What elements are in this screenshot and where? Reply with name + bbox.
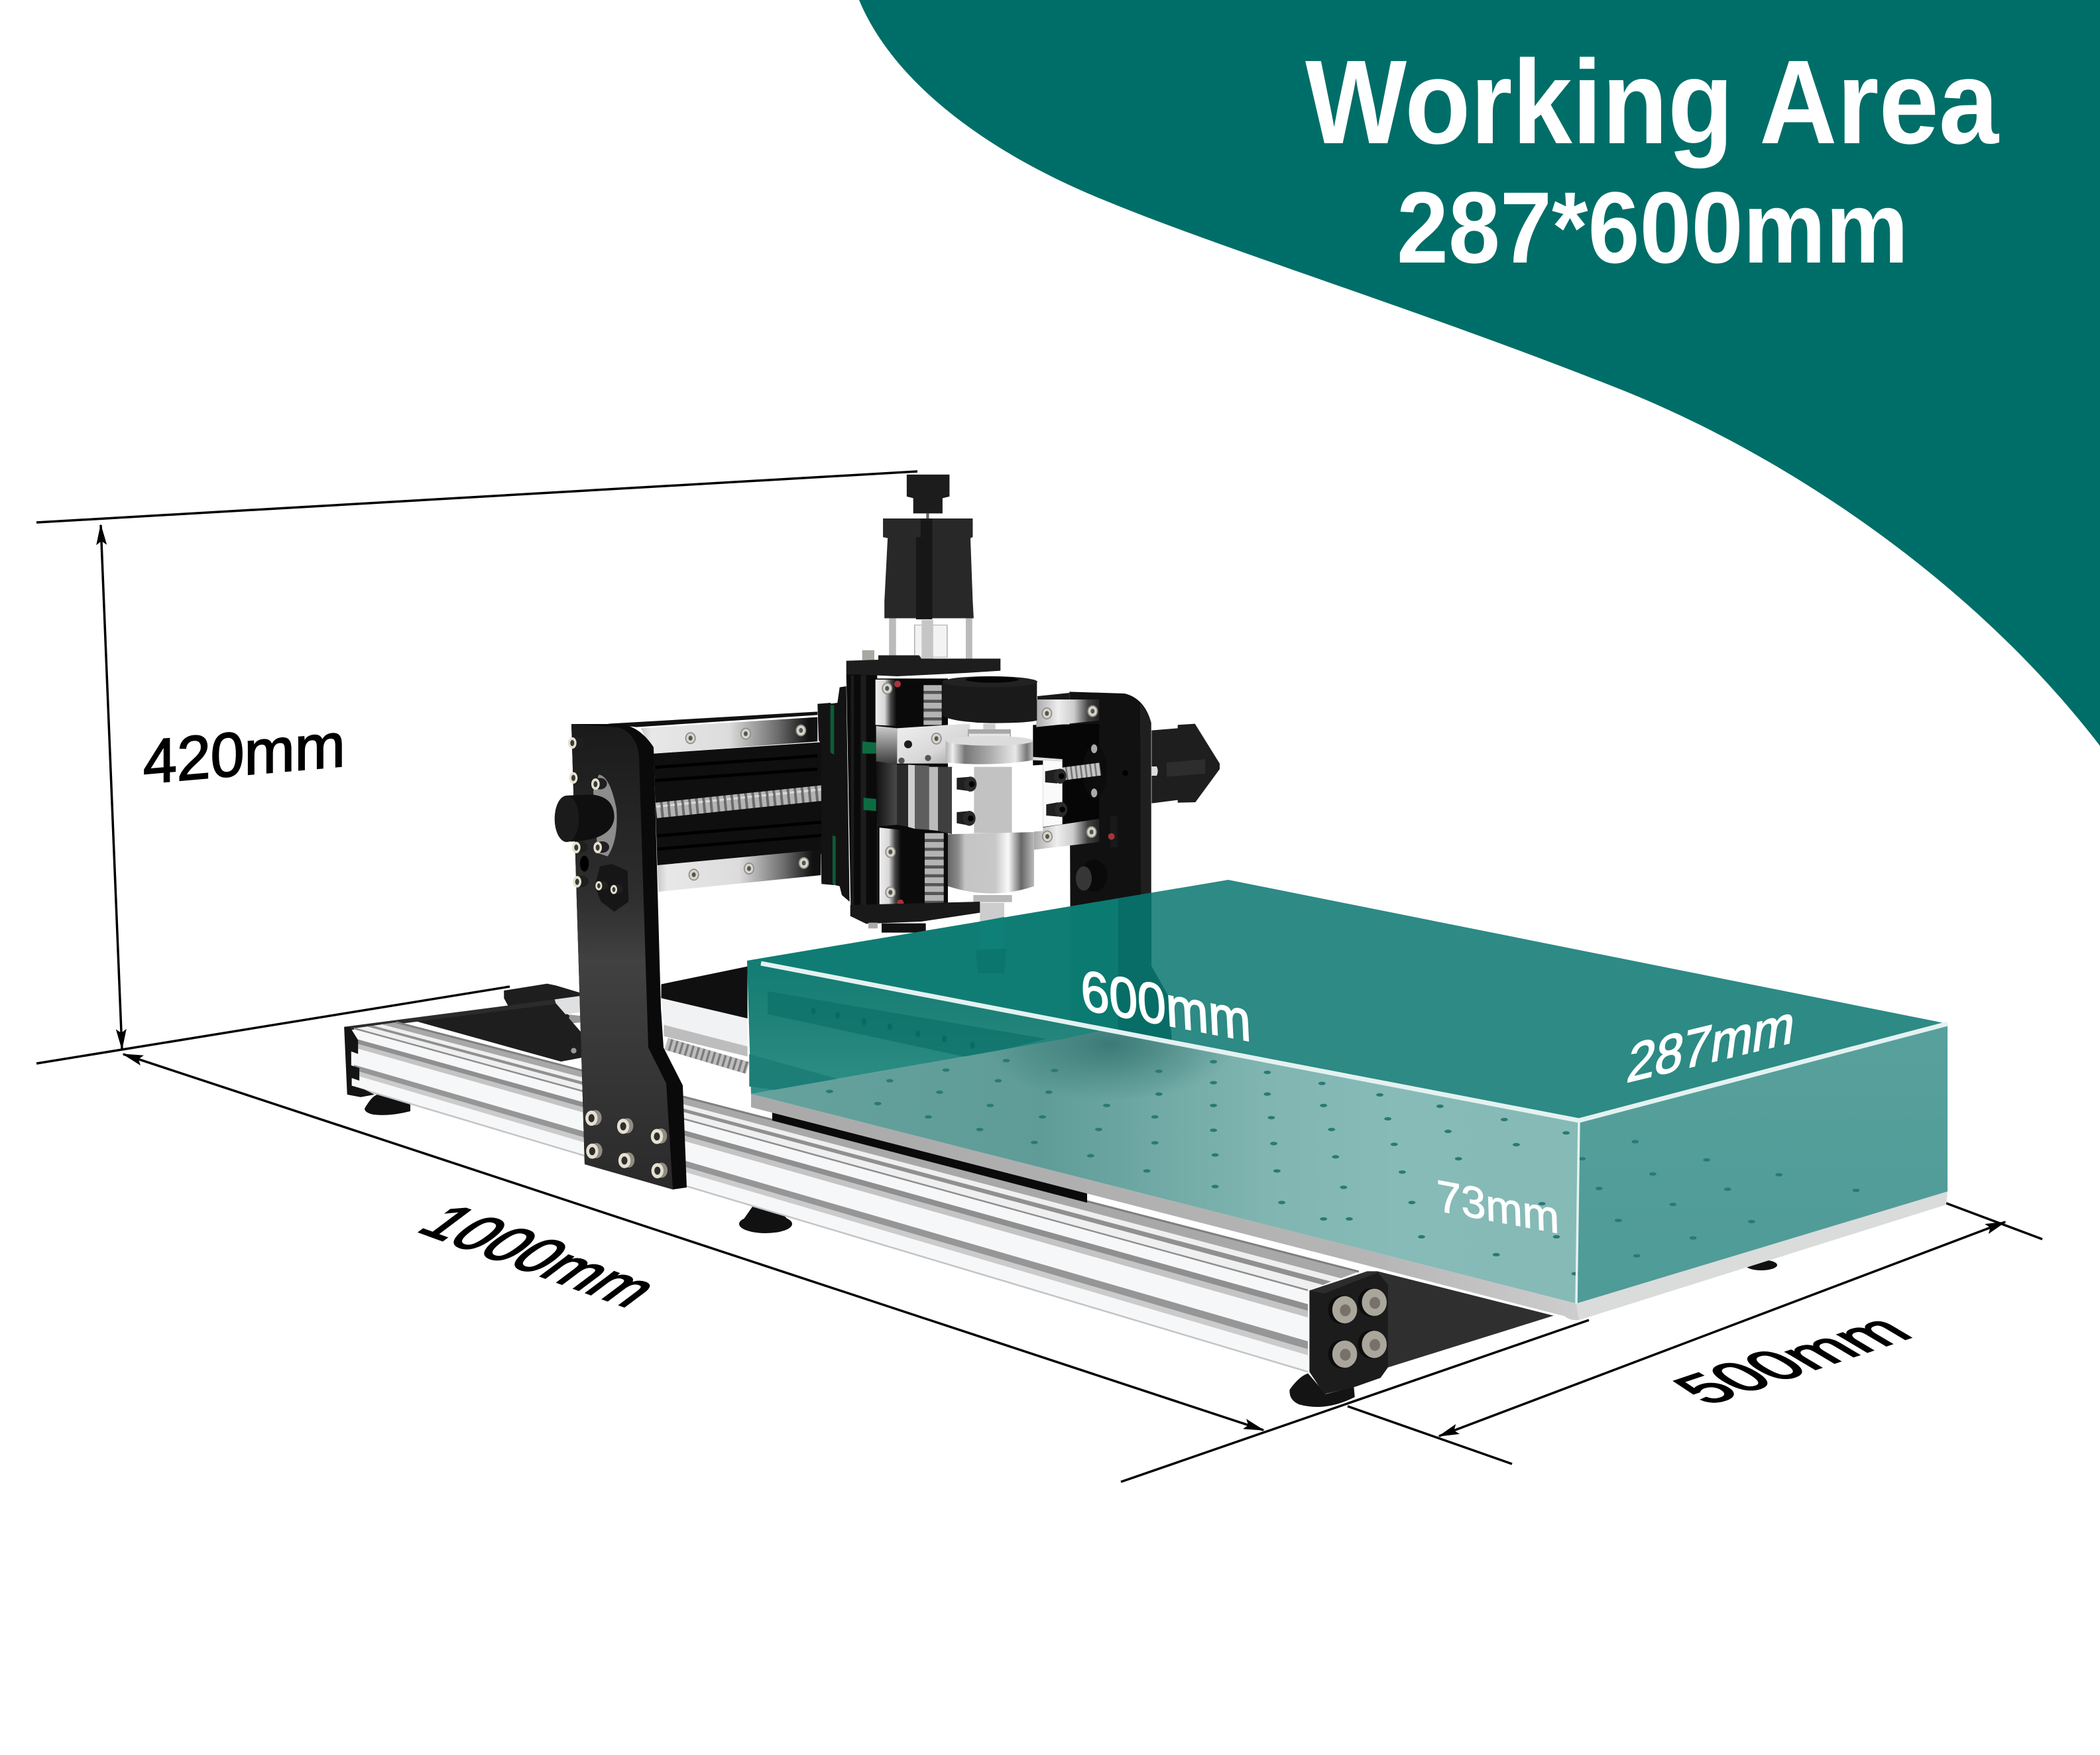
spindle lower cylinder [948, 832, 1034, 924]
spoilboard metal edge [751, 1094, 1948, 1320]
title: Working Area: Working Area [1305, 36, 2000, 169]
working volume: top face [747, 880, 1948, 1120]
leg foot bolts [585, 1110, 668, 1178]
right beam and rails [1033, 693, 1099, 850]
vertical rails [876, 680, 900, 905]
Z column [846, 674, 948, 905]
carriage blocks [817, 703, 834, 885]
right rail screws [1041, 705, 1098, 843]
left plate knob and hardware [555, 737, 628, 912]
vertical ball screw [933, 685, 934, 906]
left end plate [344, 1027, 375, 1097]
subtitle: 287*600mm: 287*600mm [1397, 171, 1908, 284]
base feet [365, 1095, 1777, 1270]
working volume: right face [1576, 1024, 1948, 1303]
gantry left leg [555, 724, 687, 1189]
label: 73mm: 73mm [1436, 1171, 1560, 1243]
label: 287mm: 287mm [1624, 993, 1799, 1095]
stepper motor: X axis [1151, 724, 1220, 804]
working volume edge highlights [761, 963, 1948, 1303]
spoilboard holes [826, 1059, 1859, 1276]
sensor dots [894, 681, 904, 906]
working volume: left face over gantry [747, 961, 1110, 1094]
Z top plate [846, 650, 1000, 676]
aluminium extrusion rail [353, 1022, 1359, 1372]
spindle upper cylinder [946, 724, 1033, 764]
right plate knob [1076, 860, 1108, 892]
label: 1000mm: 1000mm [403, 1195, 675, 1317]
X ball screw [656, 787, 846, 810]
gantry right plate [1069, 692, 1151, 981]
label: 600mm: 600mm [1079, 958, 1252, 1054]
right end plate with foot and bolts [1289, 1271, 1554, 1407]
green bearing strips [831, 705, 836, 885]
dimension lines and arrows [36, 471, 2042, 1482]
aluminium bracket [876, 724, 970, 764]
Z axis upper: rods, coupler and motor [883, 475, 974, 662]
Z carriage and spindle [821, 650, 1067, 933]
label: 420mm: 420mm [143, 709, 345, 797]
spindle mount block [876, 757, 1063, 835]
left rail screws [685, 725, 809, 880]
label: 500mm: 500mm [1657, 1306, 1927, 1413]
see-through gantry details [749, 991, 1047, 1090]
bed shadow [1012, 1031, 1216, 1090]
Z bottom plate [850, 902, 980, 933]
right gantry plate and beam section [1033, 692, 1151, 981]
carriage back plate [821, 686, 850, 902]
left gantry beam [608, 703, 846, 892]
under-bed black strip [772, 1113, 1087, 1203]
working volume: left face over bed [751, 1031, 1579, 1303]
right screw flange [1063, 745, 1128, 847]
base rear parts: motor, bracket, far rail, screw [344, 967, 748, 1068]
teal banner [859, 0, 2100, 746]
spindle clamp bolts [957, 768, 1067, 826]
spindle collar [943, 676, 1037, 723]
